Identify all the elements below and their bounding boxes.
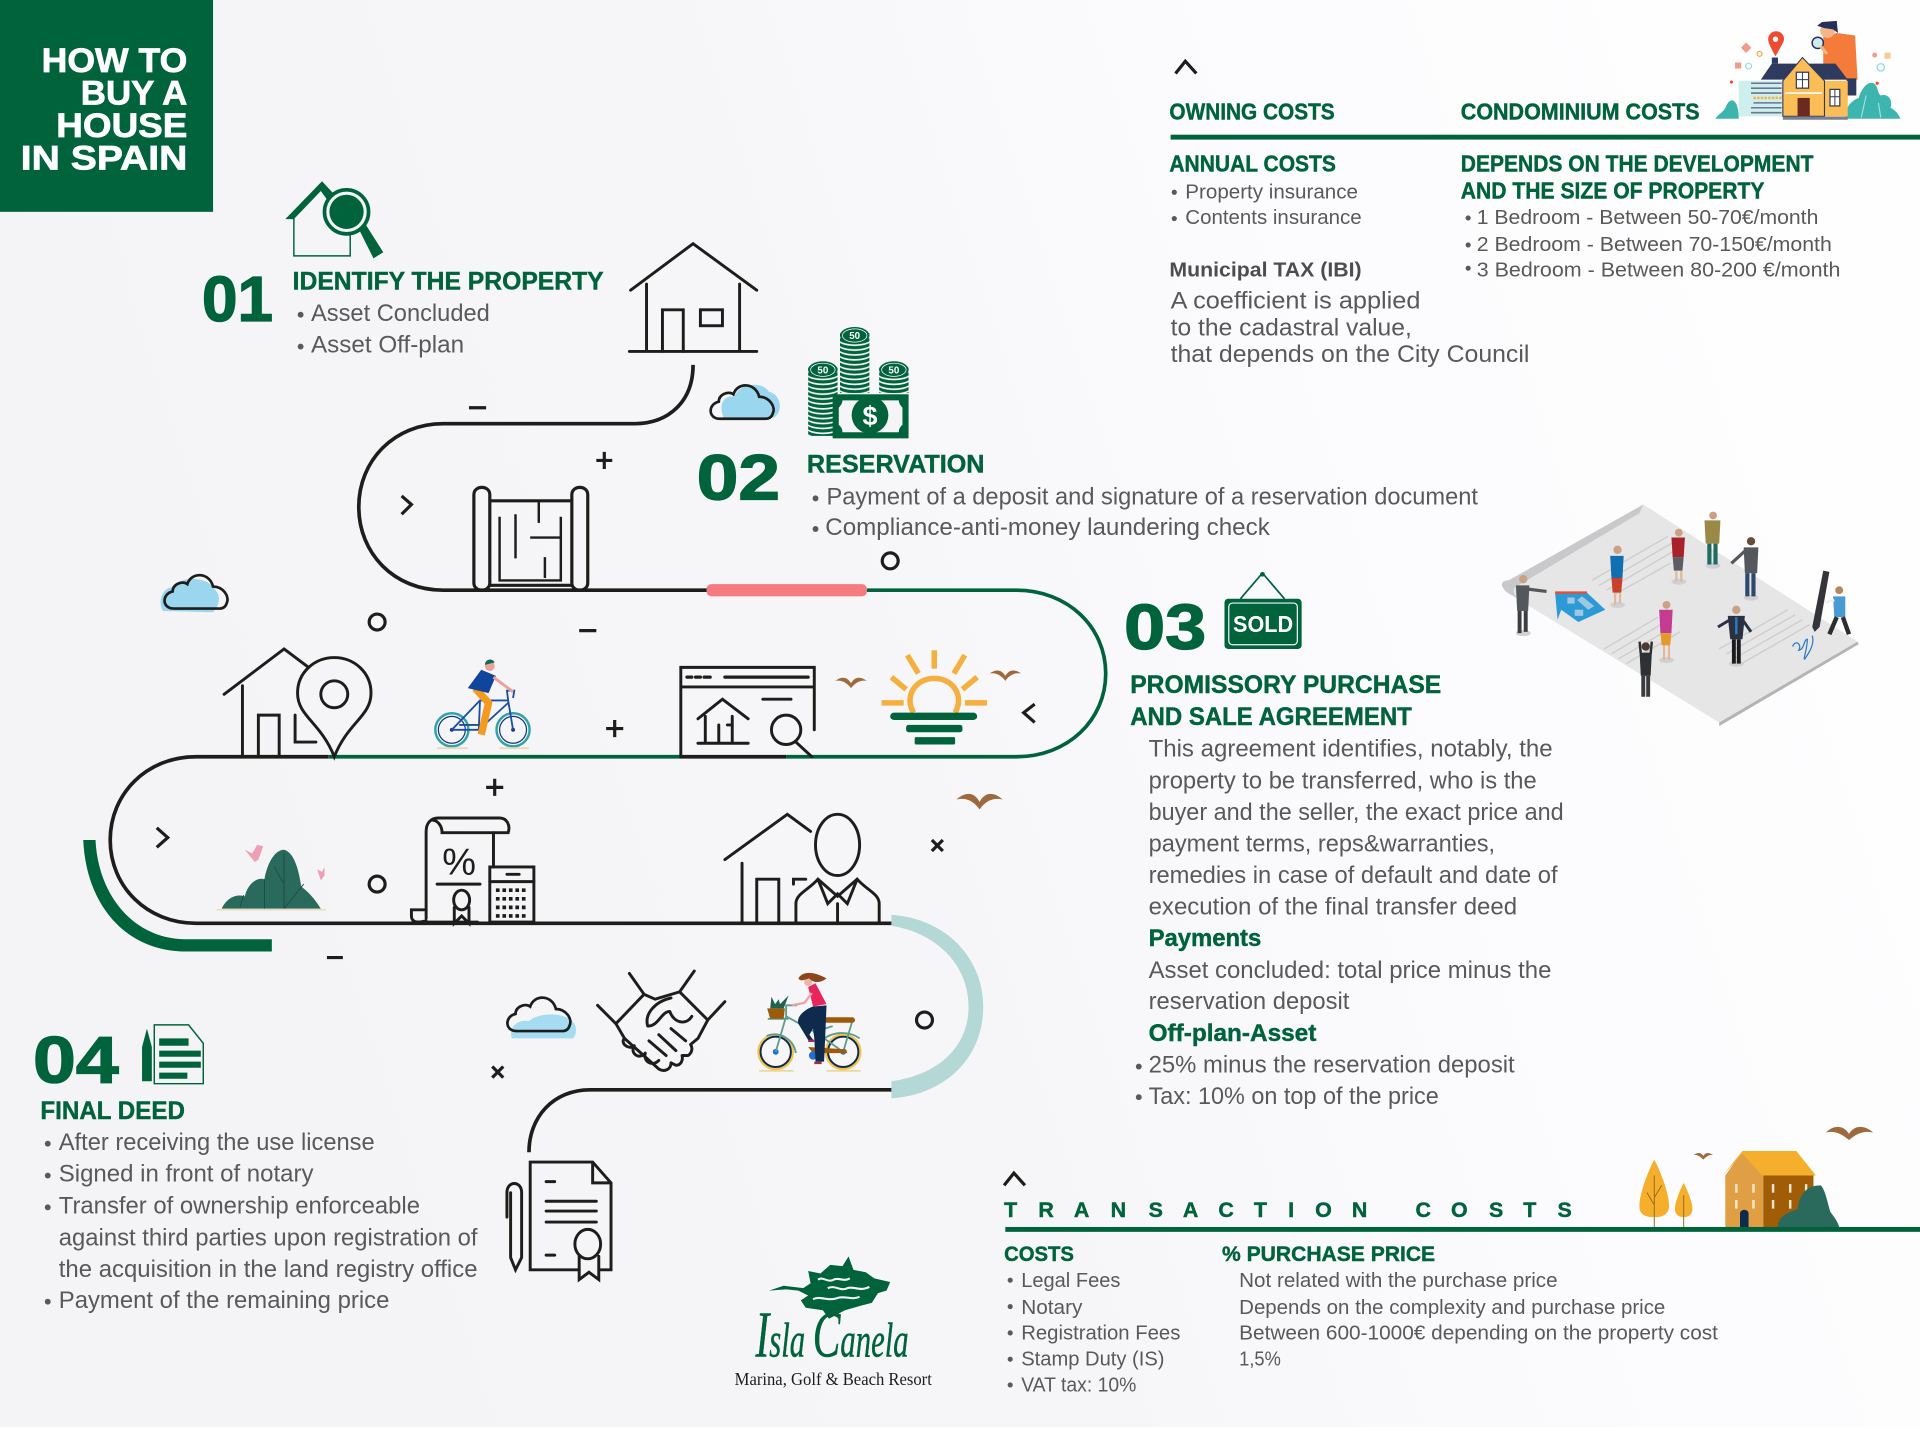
step 01 text: IDENTIFY THE PROPERTY [293, 268, 604, 296]
panel: owning and condominium costs: that depends on the City Council [1171, 341, 1529, 368]
icon: house step 1 [629, 244, 757, 351]
title block: HOUSE [56, 107, 187, 145]
panel: owning and condominium costs: 3 Bedroom - Between 80-200 €/month [1477, 260, 1840, 282]
title block: HOW TO [42, 42, 187, 80]
panel: owning and condominium costs [1169, 61, 1920, 368]
step 04 text: Signed in front of notary [59, 1161, 314, 1188]
icon: tax document and calculator [411, 818, 534, 923]
panel: owning and condominium costs: Property insurance [1185, 181, 1358, 203]
panel: transaction costs: TRANSACTION COSTS [1004, 1198, 1572, 1222]
step 02 number: 02 [697, 443, 780, 514]
panel: owning and condominium costs: Contents insurance [1185, 207, 1362, 229]
panel: transaction costs: 1,5% [1239, 1348, 1281, 1370]
step 03 text: Payments [1149, 925, 1261, 952]
step 04 text [40, 1097, 478, 1314]
title block: BUY A [81, 75, 187, 113]
icon: coin stacks and banknote [808, 327, 909, 438]
icon: coin stacks and banknote: 50 [888, 365, 900, 376]
step 03 text: 25% minus the reservation deposit [1149, 1052, 1515, 1079]
panel: transaction costs: Notary [1021, 1297, 1083, 1319]
step 03 text: payment terms, reps&warranties, [1149, 831, 1495, 858]
step 03 text: property to be transferred, who is the [1149, 768, 1537, 795]
step 04 text: Transfer of ownership enforceable [59, 1192, 420, 1219]
panel: owning and condominium costs: to the cadastral value, [1171, 315, 1412, 342]
step 04 text: FINAL DEED [40, 1097, 185, 1125]
step 01 text: Asset Concluded [311, 300, 490, 327]
panel: transaction costs: % PURCHASE PRICE [1222, 1242, 1435, 1266]
icon: sun [882, 650, 987, 745]
panel: owning and condominium costs: ANNUAL COSTS [1169, 150, 1336, 176]
chevron up [1004, 1173, 1025, 1185]
icon: agent with house [725, 814, 879, 922]
title block: IN SPAIN [21, 140, 187, 178]
road chevrons and decorative symbols [157, 408, 1035, 1078]
icon: sold sign: SOLD [1233, 611, 1293, 637]
panel: transaction costs: Not related with the purchase price [1239, 1270, 1558, 1292]
step 02 text: RESERVATION [807, 451, 984, 479]
step 01 number: 01 [202, 264, 273, 335]
icon: coin stacks and banknote: $ [863, 401, 878, 431]
panel: owning and condominium costs: 2 Bedroom - Between 70-150€/month [1477, 234, 1832, 256]
illustration: people on contract [1502, 504, 1859, 726]
step 01 text: Asset Off-plan [311, 332, 464, 359]
icon: cyclist woman [759, 973, 861, 1071]
panel: transaction costs: Registration Fees [1021, 1323, 1180, 1345]
panel: transaction costs: Between 600-1000€ depending on the property cost [1239, 1323, 1718, 1345]
figures [1516, 575, 1547, 636]
step 03 text: Asset concluded: total price minus the [1149, 957, 1551, 984]
logo: Isla Canela: Isla Canela [755, 1299, 909, 1372]
icon: sold sign [1224, 572, 1302, 649]
panel: owning and condominium costs: AND THE SIZE OF PROPERTY [1461, 177, 1764, 203]
step 04 number: 04 [33, 1023, 119, 1097]
step 03 text: execution of the final transfer deed [1149, 894, 1517, 921]
panel: owning and condominium costs: 1 Bedroom - Between 50-70€/month [1477, 207, 1818, 229]
panel: transaction costs: VAT tax: 10% [1021, 1375, 1136, 1397]
logo: Isla Canela [735, 1256, 932, 1389]
icons: brown birds [835, 670, 1021, 809]
title block [0, 0, 213, 212]
icon: property search browser [681, 667, 814, 757]
step 02 text: Compliance-anti-money laundering check [825, 514, 1270, 541]
step 03 text: buyer and the seller, the exact price and [1149, 799, 1564, 826]
icon: green house with magnifier [285, 181, 383, 258]
icon: green bush with butterflies [217, 845, 326, 910]
step 04 text: against third parties upon registration of [59, 1224, 478, 1251]
icon: cloud right of road [711, 385, 780, 419]
panel: owning and condominium costs: DEPENDS ON THE DEVELOPMENT [1461, 150, 1814, 176]
green road arc [83, 840, 272, 951]
step 03 text: This agreement identifies, notably, the [1149, 736, 1553, 763]
icon: cyclist man [435, 659, 530, 748]
winding road path [83, 365, 1106, 1152]
panel: owning and condominium costs: OWNING COSTS [1169, 98, 1335, 124]
step 03 text: Tax: 10% on top of the price [1149, 1083, 1439, 1110]
chevron up [1176, 61, 1196, 73]
panel: owning and condominium costs: Municipal TAX (IBI) [1169, 260, 1362, 282]
logo: Isla Canela: Marina, Golf & Beach Resort [735, 1369, 932, 1389]
icon: handshake [598, 971, 725, 1070]
icon: house and map pin [224, 649, 371, 757]
icon: tax document and calculator: % [442, 841, 476, 883]
step 03 text: Off-plan-Asset [1149, 1020, 1316, 1047]
panel: transaction costs: Stamp Duty (IS) [1021, 1348, 1164, 1370]
panel: transaction costs: COSTS [1004, 1242, 1074, 1266]
step 03 text: reservation deposit [1149, 988, 1350, 1015]
icon: coin stacks and banknote: 50 [817, 365, 829, 376]
icon: coin stacks and banknote: 50 [849, 331, 861, 342]
red road segment [707, 584, 867, 596]
icon: signed document with pen and seal [507, 1162, 611, 1280]
illustration: orange house and trees [1639, 1127, 1873, 1227]
step 01 text [293, 268, 604, 359]
illustration: man inspecting house [1716, 21, 1900, 119]
icon: blueprint [474, 487, 588, 590]
step 04 text: the acquisition in the land registry office [59, 1256, 478, 1283]
step 02 text [807, 451, 1478, 541]
panel: owning and condominium costs: A coefficient is applied [1171, 288, 1420, 315]
step 02 text: Payment of a deposit and signature of a reservation document [827, 483, 1478, 510]
step 04 text: Payment of the remaining price [59, 1287, 389, 1314]
panel: transaction costs: Depends on the complexity and purchase price [1239, 1297, 1665, 1319]
icon: green document and pen [142, 1025, 203, 1084]
step 03 text: AND SALE AGREEMENT [1130, 703, 1412, 731]
panel: transaction costs: Legal Fees [1021, 1270, 1120, 1292]
icon: cloud near handshake [507, 998, 576, 1038]
step 03 text: remedies in case of default and date of [1149, 862, 1558, 889]
step 04 text: After receiving the use license [59, 1129, 375, 1156]
panel: owning and condominium costs: CONDOMINIUM COSTS [1461, 98, 1700, 124]
step 03 number: 03 [1124, 592, 1206, 663]
pale teal road arc [891, 915, 983, 1098]
step 03 text [1130, 671, 1564, 1110]
panel: transaction costs [1004, 1173, 1920, 1397]
icon: cloud left [161, 575, 227, 612]
step 03 text: PROMISSORY PURCHASE [1130, 671, 1441, 699]
